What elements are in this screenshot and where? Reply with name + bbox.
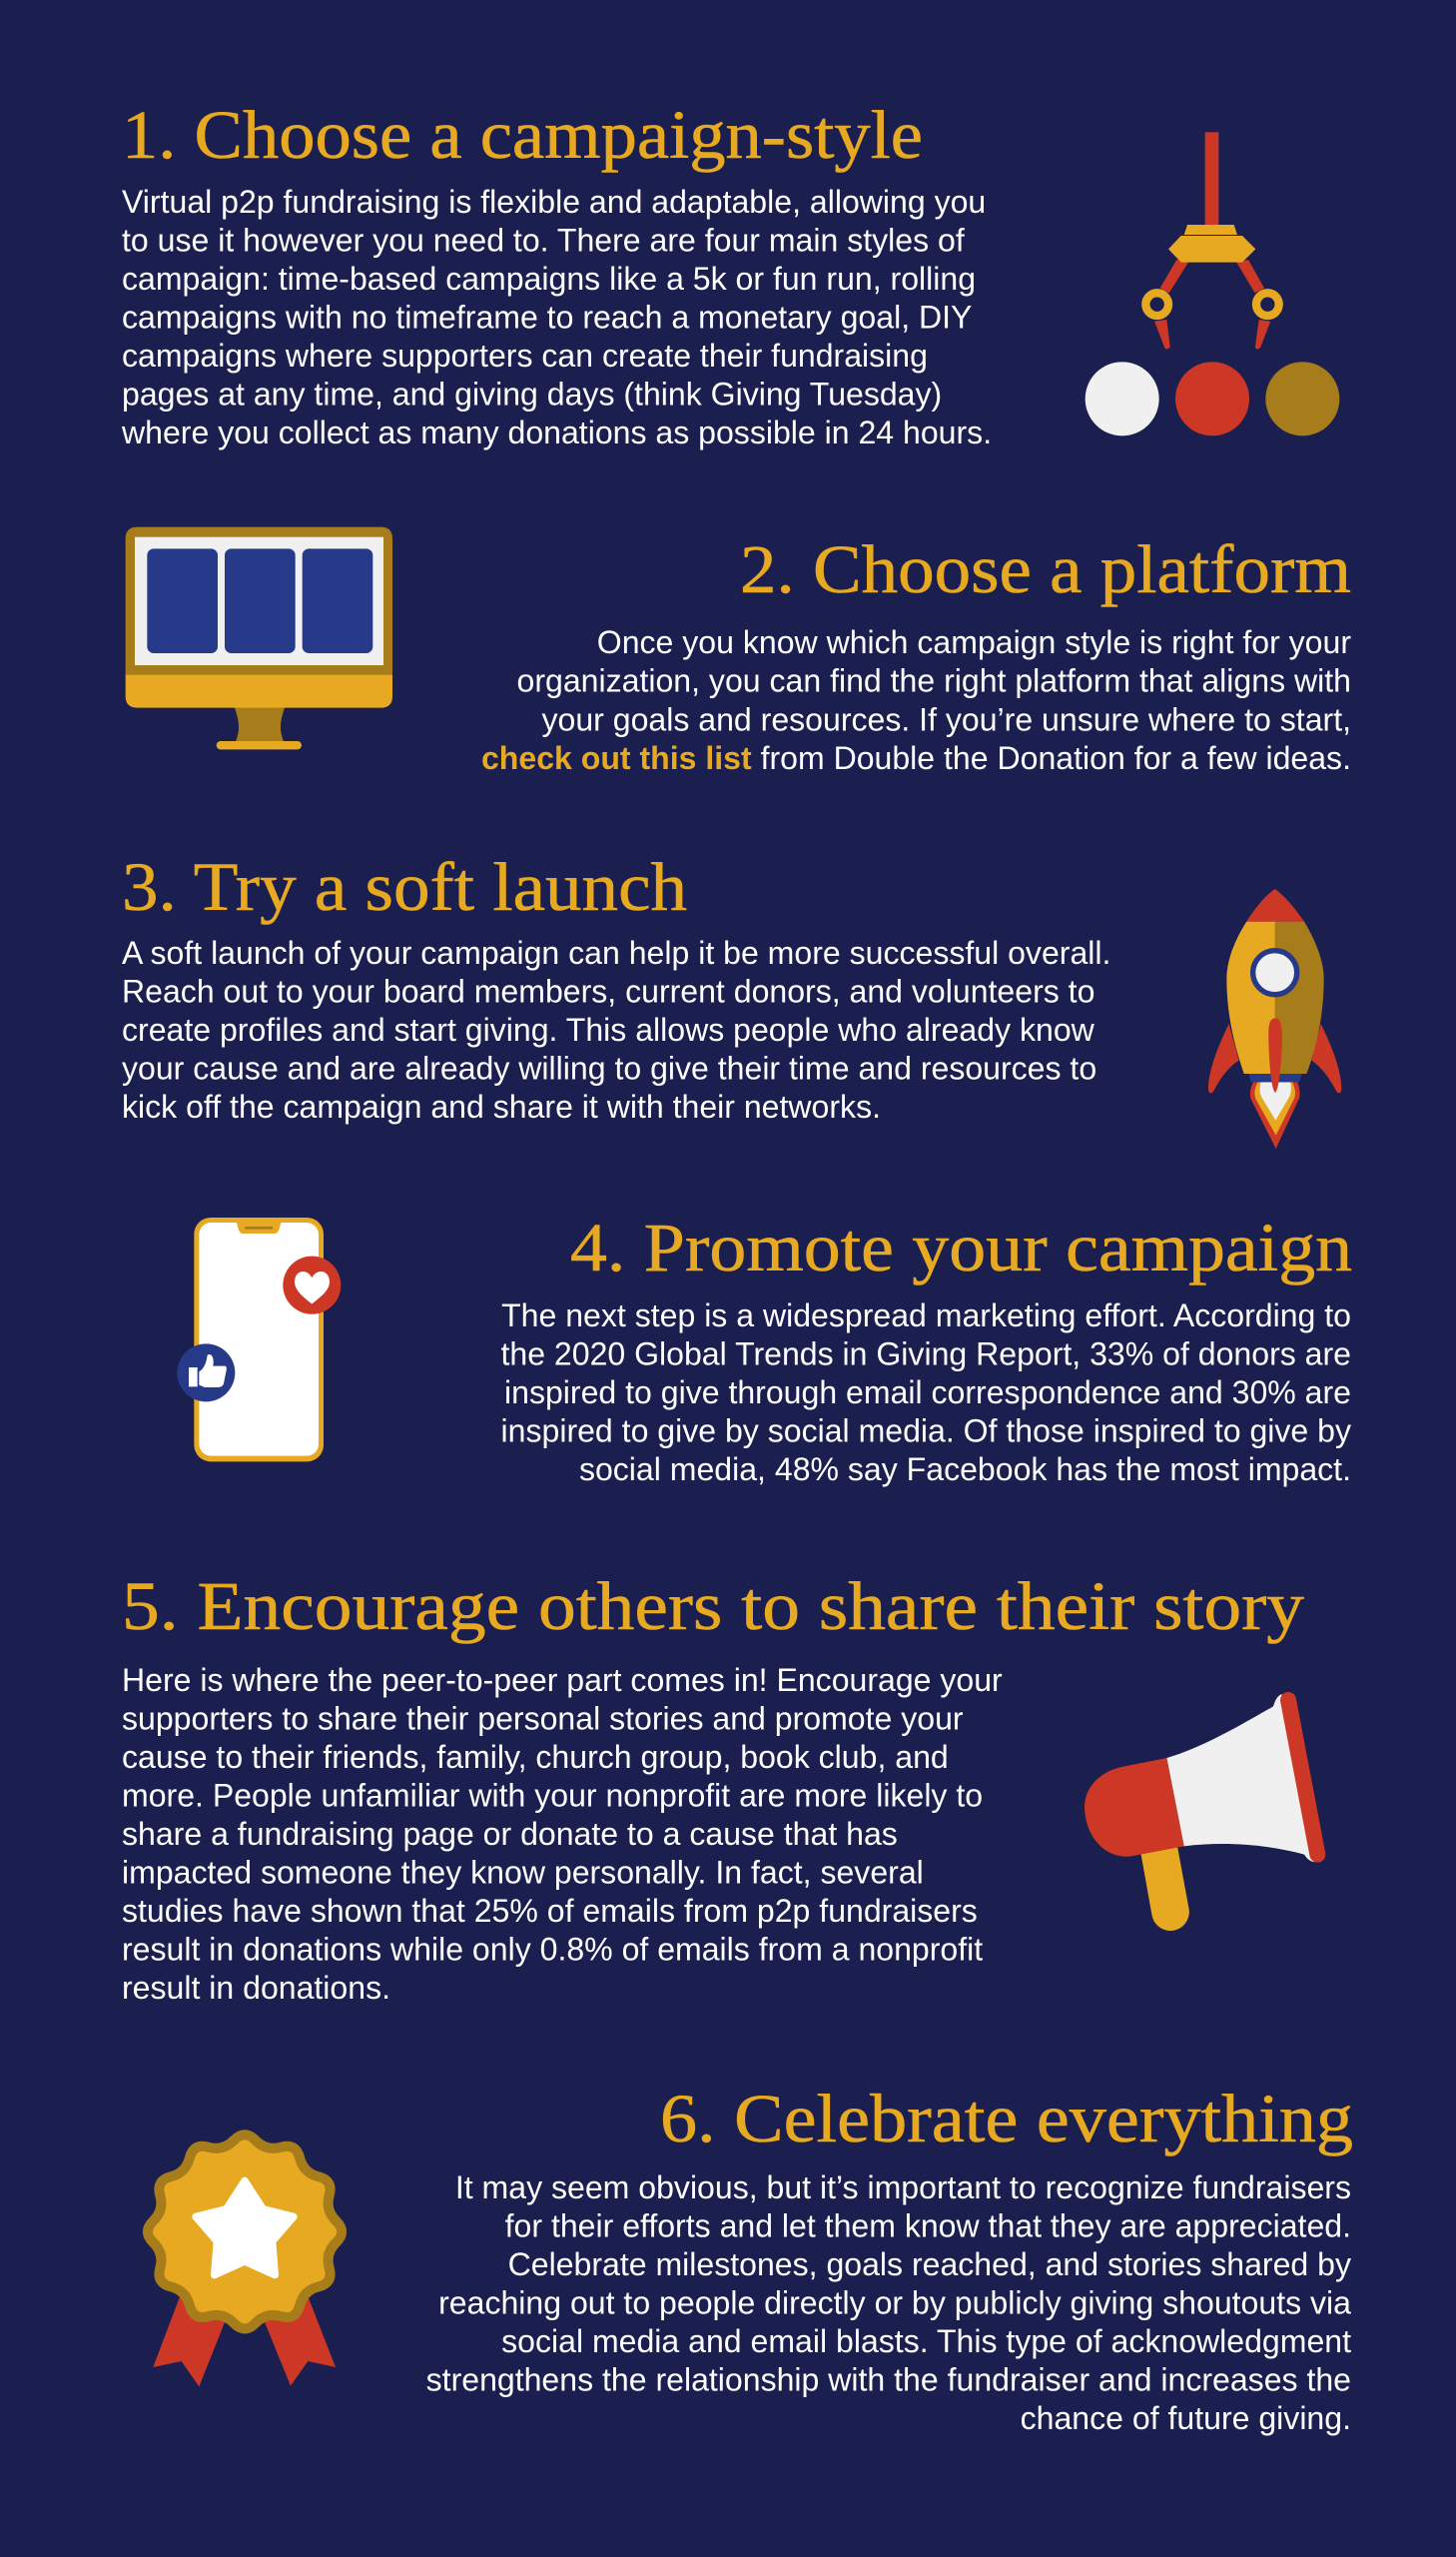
icon: award medal with ribbons <box>148 2134 342 2386</box>
text block: step 4: The next step is a widespread marketing effort. According to <box>501 1297 1351 1333</box>
text block: step 5: cause to their friends, family, church group, book club, and <box>122 1739 949 1775</box>
icon: rocket <box>1208 889 1341 1149</box>
text block: step 2: your goals and resources. If you’re unsure where to start, <box>542 701 1351 737</box>
text block: step 5: Here is where the peer-to-peer part comes in! Encourage your <box>122 1662 1003 1698</box>
text block: step 3: Reach out to your board members, current donors, and volunteers to <box>122 973 1094 1009</box>
panel: step 3 try a soft launch <box>122 849 1341 1149</box>
text block: step 3: kick off the campaign and share it with their networks. <box>122 1089 881 1125</box>
text block: step 5: impacted someone they know personally. In fact, several <box>122 1854 924 1890</box>
text block: step 6: It may seem obvious, but it’s important to recognize fundraisers <box>455 2169 1351 2205</box>
text block: step 1: where you collect as many donations as possible in 24 hours. <box>121 415 992 450</box>
panel: step 5 encourage others to share their story <box>122 1568 1317 2006</box>
text block: step 5 <box>122 1662 1003 2006</box>
text block: step 6: reaching out to people directly or by publicly giving shoutouts via <box>438 2285 1351 2321</box>
heading: step 6: 6. Celebrate everything <box>660 2081 1353 2156</box>
text block: step 1: campaign: time-based campaigns like a 5k or fun run, rolling <box>122 261 976 297</box>
icon: claw machine with three balls <box>1086 132 1339 435</box>
text block: step 3 <box>122 935 1110 1125</box>
text block: step 4: inspired to give through email correspondence and 30% are <box>504 1374 1351 1410</box>
text block: step 5: supporters to share their personal stories and promote your <box>122 1700 964 1736</box>
heading: step 4: 4. Promote your campaign <box>570 1210 1352 1285</box>
heading: step 1: 1. Choose a campaign-style <box>122 97 923 173</box>
text block: step 3: create profiles and start giving. This allows people who already know <box>122 1012 1095 1048</box>
text block: step 1: campaigns with no timeframe to reach a monetary goal, DIY <box>122 300 972 336</box>
text block: step 4: social media, 48% say Facebook has the most impact. <box>579 1451 1351 1487</box>
text block: step 6 <box>426 2169 1351 2436</box>
text block: step 1: Virtual p2p fundraising is flexible and adaptable, allowing you <box>122 184 986 220</box>
text block: step 6: for their efforts and let them know that they are appreciated. <box>505 2207 1351 2243</box>
text block: step 4 <box>500 1297 1351 1487</box>
text block: step 6: Celebrate milestones, goals reached, and stories shared by <box>508 2246 1351 2282</box>
text block: step 6: chance of future giving. <box>1021 2400 1351 2436</box>
text block: step 1 <box>121 184 992 450</box>
icon: megaphone <box>1085 1694 1317 1931</box>
text block: step 1: to use it however you need to. There are four main styles of <box>122 222 965 258</box>
heading: step 2: 2. Choose a platform <box>740 531 1351 607</box>
heading: step 3: 3. Try a soft launch <box>122 849 687 925</box>
text block: step 2: organization, you can find the right platform that aligns with <box>517 663 1351 699</box>
text block: step 6: social media and email blasts. This type of acknowledgment <box>501 2323 1351 2359</box>
panel: step 6 celebrate everything <box>148 2081 1353 2436</box>
icon: smartphone with heart and thumbs up <box>177 1218 341 1461</box>
text block: step 5: result in donations while only 0.8% of emails from a nonprofit <box>122 1932 983 1968</box>
text block: step 3: A soft launch of your campaign can help it be more successful overall. <box>122 935 1110 971</box>
text block: step 2: check out this list from Double the Donation for a few ideas. <box>481 740 1351 776</box>
text block: step 4: inspired to give by social media. Of those inspired to give by <box>501 1412 1351 1448</box>
icon: desktop monitor <box>126 527 392 749</box>
text block: step 2: Once you know which campaign style is right for your <box>597 624 1351 660</box>
text block: step 6: strengthens the relationship with the fundraiser and increases the <box>426 2361 1351 2397</box>
text block: step 5: result in donations. <box>122 1970 390 2006</box>
panel: step 1 choose a campaign style <box>121 97 1339 450</box>
text block: step 4: the 2020 Global Trends in Giving Report, 33% of donors are <box>500 1336 1351 1372</box>
text block: step 2 <box>481 624 1351 776</box>
text block: step 3: your cause and are already willing to give their time and resources to <box>122 1051 1096 1087</box>
text block: step 5: more. People unfamiliar with your nonprofit are more likely to <box>122 1778 983 1814</box>
panel: step 4 promote your campaign <box>177 1210 1352 1487</box>
text block: step 1: campaigns where supporters can create their fundraising <box>122 338 928 374</box>
text block: step 5: studies have shown that 25% of emails from p2p fundraisers <box>122 1893 978 1929</box>
text block: step 1: pages at any time, and giving days (think Giving Tuesday) <box>122 376 942 412</box>
text block: step 5: share a fundraising page or donate to a cause that has <box>122 1816 898 1852</box>
heading: step 5: 5. Encourage others to share their story <box>122 1568 1305 1644</box>
panel: step 2 choose a platform <box>126 527 1351 776</box>
